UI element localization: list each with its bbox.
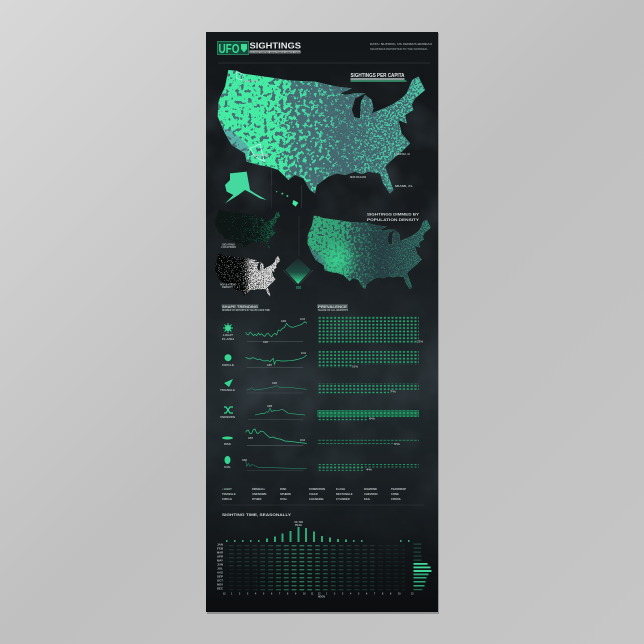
hour labels: 6 (366, 594, 368, 596)
month labels: JUL (217, 568, 224, 570)
month labels: MAY (217, 560, 224, 562)
heading: sightings per capita (350, 73, 406, 82)
hour labels: 6 (271, 594, 273, 596)
shape legend: CIGAR (309, 492, 318, 496)
hour labels: 12 (223, 594, 226, 596)
hour labels: 4 (350, 592, 352, 596)
chart year labels: 1988 (267, 406, 273, 408)
callouts on map: PHOENIX (254, 155, 269, 157)
shape labels: CIRCLE (222, 365, 235, 367)
icon: diamond legend (283, 216, 313, 289)
trend: circle (246, 355, 307, 367)
contiguous US map (215, 67, 428, 197)
shape labels: TRIANGLE (220, 389, 236, 392)
month labels: FEB (217, 548, 223, 550)
month labels: NOV (217, 584, 224, 586)
chart year labels: 2012 (300, 319, 306, 321)
chart year labels: 1952 (242, 460, 248, 462)
dots: circle: 10% (352, 366, 358, 368)
dots: light (317, 316, 423, 344)
chart year labels (242, 319, 307, 462)
heading: shape trending: SHAPE TRENDING (222, 304, 258, 309)
shape legend: TRIANGLE (222, 492, 236, 496)
heading: prevalence: SHARE OF ALL REPORTS (318, 309, 348, 312)
icon: disk (222, 436, 233, 440)
small map: sighting locations: SIGHTING (222, 244, 235, 246)
month labels: JUN (217, 564, 223, 566)
shape legend: TEARDROP (391, 487, 406, 491)
chart year labels: 1957 (248, 438, 254, 440)
month labels: AUG (217, 572, 223, 574)
hour labels: 5 (358, 594, 360, 596)
month labels: DEC (217, 588, 223, 590)
month labels: MAR (217, 552, 223, 554)
month labels: APR (217, 556, 223, 558)
month labels: JAN (217, 544, 223, 546)
header note: DATA: NUFORC, US CENSUS BUREAU (370, 42, 432, 46)
heading: sighting time, seasonally: SIGHTING TIME, SEASONALLY (222, 512, 291, 517)
dots: light: 22% (417, 342, 423, 344)
shape legend: OVAL (280, 497, 288, 501)
month labels: SEP (217, 576, 224, 578)
hour labels: 1 (326, 594, 328, 596)
small map: sighting locations (214, 209, 281, 250)
shape labels (220, 335, 236, 469)
shape labels: OVAL (224, 466, 232, 469)
shape labels: LIGHT (223, 335, 234, 337)
map: sightings per capita (215, 67, 428, 197)
header (217, 41, 432, 56)
shape legend: • LIGHT (222, 487, 232, 491)
shape legend: FIREBALL (252, 487, 266, 491)
shape legend: DIAMOND (364, 487, 377, 491)
shape legend: CHANGING (309, 497, 324, 501)
shape legend: CROSS (391, 497, 401, 501)
subtitle (250, 50, 301, 54)
shape labels: UNKNOWN (220, 417, 235, 419)
heading: dimmed by population density: SIGHTINGS DIMMED BY (367, 212, 419, 216)
shape legend: SPHERE (280, 492, 291, 496)
hour labels: 9 (390, 594, 392, 596)
shape legend: OTHER (252, 497, 261, 501)
hour labels: 8 (287, 594, 289, 596)
hour labels: 7 (374, 594, 376, 596)
shape legend: CIRCLE (222, 497, 232, 501)
hour labels: 8 (382, 594, 384, 596)
hour labels: 1 (231, 594, 233, 596)
prevalence dot grids (317, 316, 423, 472)
shape labels: DISK (224, 444, 231, 446)
shape legend (222, 487, 406, 501)
chart year labels: 1987 (267, 365, 273, 367)
heatmap: month by hour (225, 543, 405, 591)
trend: light (246, 322, 307, 342)
shape trending charts (246, 322, 307, 471)
dots: disk: 5% (394, 444, 400, 446)
hour labels: 2 (239, 594, 241, 596)
hour labels: 12 (411, 594, 414, 596)
chart year labels: 2012 (300, 440, 306, 442)
hour labels: 9 (295, 594, 297, 596)
month labels (217, 544, 224, 590)
heading: shape trending: NUMBER OF REPORTS BY SHAPE OVER TIME (222, 309, 270, 312)
peak label: 11:00 (294, 522, 304, 524)
header note (370, 42, 432, 51)
trend: disk (246, 429, 307, 445)
heading: shape trending (222, 304, 270, 312)
heading: prevalence: PREVALENCE (318, 304, 347, 309)
callouts on map: NEW ORLEANS (350, 176, 366, 179)
chart year labels: 2012 (301, 353, 307, 355)
peak label (294, 522, 304, 527)
small map: population density: POPULATION (220, 284, 235, 286)
shape legend: EGG (364, 497, 370, 501)
callouts on map (244, 80, 414, 188)
shape legend: UNKNOWN (252, 492, 266, 496)
icon: circle (224, 354, 232, 361)
inset: Hawaii (272, 185, 302, 208)
heading: dimmed by population density (367, 212, 419, 222)
shape legend: FLASH (336, 487, 345, 491)
small map: sighting locations: LOCATIONS (221, 246, 237, 249)
inset: Alaska (225, 168, 272, 208)
dots: triangle: 7% (390, 392, 396, 394)
dots: unknown: 6% (369, 418, 375, 420)
icon: Washington outline (237, 72, 243, 80)
heading: dimmed by population density: POPULATION DENSITY (367, 217, 419, 222)
icon: unknown shuffle (224, 407, 233, 413)
header note: SIGHTINGS REPORTED TO THE NATIONAL (370, 48, 429, 51)
shape legend: CONE (391, 492, 399, 496)
shape labels: FLASH (222, 338, 235, 341)
heading: prevalence (317, 304, 348, 312)
dots: circle (317, 351, 419, 368)
hour labels: 2 (334, 594, 336, 596)
chart year labels: 1990 (263, 342, 269, 344)
heading: sightings per capita: SIGHTINGS PER CAPITA (350, 73, 405, 79)
callouts on map: MIAMI, FL (395, 185, 414, 188)
trend: oval (246, 460, 307, 471)
hour labels: 7 (279, 594, 281, 596)
hour labels: 5 (263, 594, 265, 596)
hour labels: 10 (398, 594, 401, 596)
shape legend: CHEVRON (364, 492, 377, 496)
dots: oval: 4% (366, 468, 372, 472)
trend: triangle (247, 386, 307, 393)
hour labels: NOON (318, 596, 325, 598)
dots: triangle (317, 383, 419, 394)
month labels: OCT (217, 580, 224, 582)
shape legend: FORMATION (309, 487, 325, 491)
icon: light (223, 323, 233, 333)
hour labels: 4 (255, 592, 257, 596)
chart year labels: 1995 (272, 383, 278, 385)
small map: population density: DENSITY (222, 287, 234, 289)
hourly bars (226, 527, 410, 542)
dots: unknown (317, 410, 419, 420)
hour labels: 3 (342, 594, 344, 596)
title: SIGHTINGS (250, 42, 302, 51)
chart year labels: 1999 (281, 321, 287, 323)
shape legend: CYLINDER (336, 497, 350, 501)
hour labels (223, 592, 414, 598)
subtitle: US REPORTED SIGHTINGS SINCE 1905 (250, 52, 301, 54)
icon: Arizona outline (250, 144, 264, 162)
icon: oval (224, 456, 230, 464)
hour labels: 12 (318, 594, 321, 596)
hour labels: 10 (303, 594, 306, 596)
logo UFO: UFO (218, 42, 240, 56)
icon: triangle (224, 379, 233, 387)
peak label: PEAK (295, 524, 302, 527)
dots: disk (317, 439, 419, 446)
monthly bars (414, 544, 432, 590)
poster panel (206, 32, 439, 614)
hour labels: 3 (247, 594, 249, 596)
shape legend: DISK (280, 487, 286, 491)
shape legend: RECTANGLE (336, 492, 353, 496)
hour labels: 11 (311, 594, 314, 596)
dots: oval (317, 464, 419, 472)
small map: population density (214, 253, 281, 298)
callouts on map: SEATTLE (244, 80, 259, 83)
callouts on map: NORFOLK, VA (396, 153, 410, 156)
trend: unknown (248, 408, 305, 419)
map: sightings dimmed by population density (306, 214, 433, 291)
